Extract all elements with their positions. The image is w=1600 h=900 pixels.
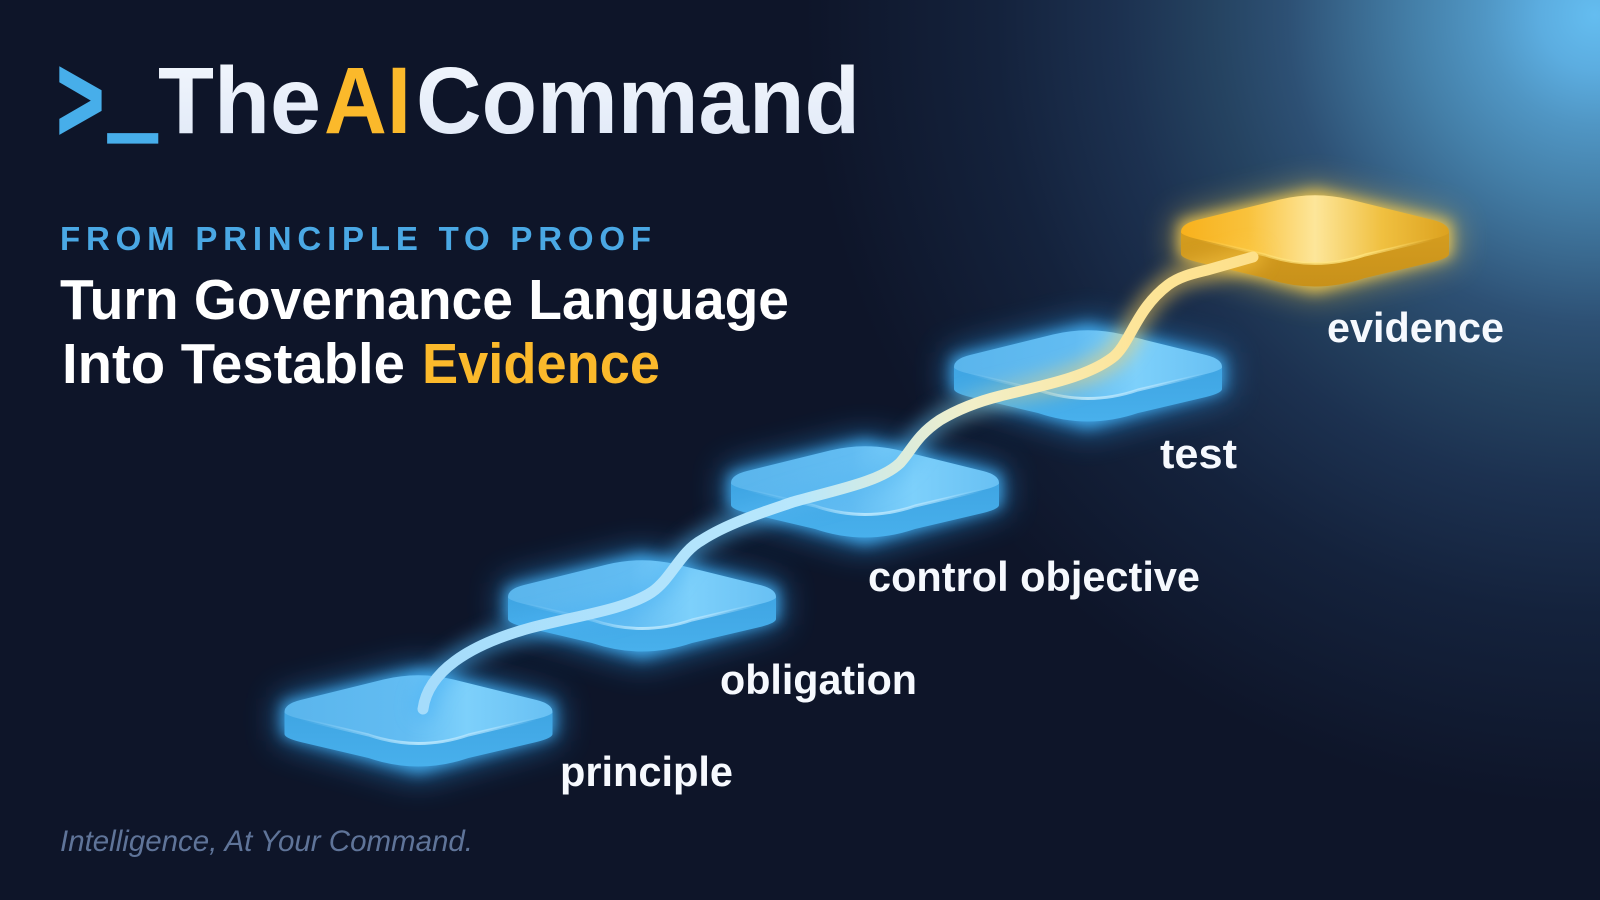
plate glows bbox=[278, 186, 1455, 779]
main title: Evidence bbox=[422, 332, 660, 396]
connector path bbox=[423, 257, 1253, 709]
main title: Turn Governance Language bbox=[60, 268, 789, 332]
step plate: control objective bbox=[731, 446, 999, 538]
label: principle: principle bbox=[560, 748, 733, 795]
brand logo bbox=[57, 0, 860, 169]
step plate: obligation bbox=[508, 560, 776, 652]
main title bbox=[60, 268, 789, 396]
logo wordmark: Command bbox=[416, 48, 860, 154]
logo wordmark: AI bbox=[324, 48, 411, 154]
label: evidence: evidence bbox=[1327, 304, 1504, 351]
eyebrow heading: FROM PRINCIPLE TO PROOF bbox=[60, 220, 651, 257]
tagline: Intelligence, At Your Command. bbox=[60, 825, 473, 858]
step plate: test bbox=[954, 330, 1222, 422]
main title: Into Testable bbox=[62, 332, 405, 396]
label: obligation: obligation bbox=[720, 656, 917, 703]
step plate: principle bbox=[284, 675, 552, 766]
label: control objective: control objective bbox=[868, 553, 1200, 600]
logo prompt mark: > bbox=[57, 31, 104, 166]
logo wordmark bbox=[158, 48, 860, 154]
logo prompt mark bbox=[57, 0, 158, 169]
step plate: evidence bbox=[1181, 195, 1449, 286]
logo wordmark: The bbox=[158, 48, 321, 154]
label: test: test bbox=[1160, 430, 1237, 477]
